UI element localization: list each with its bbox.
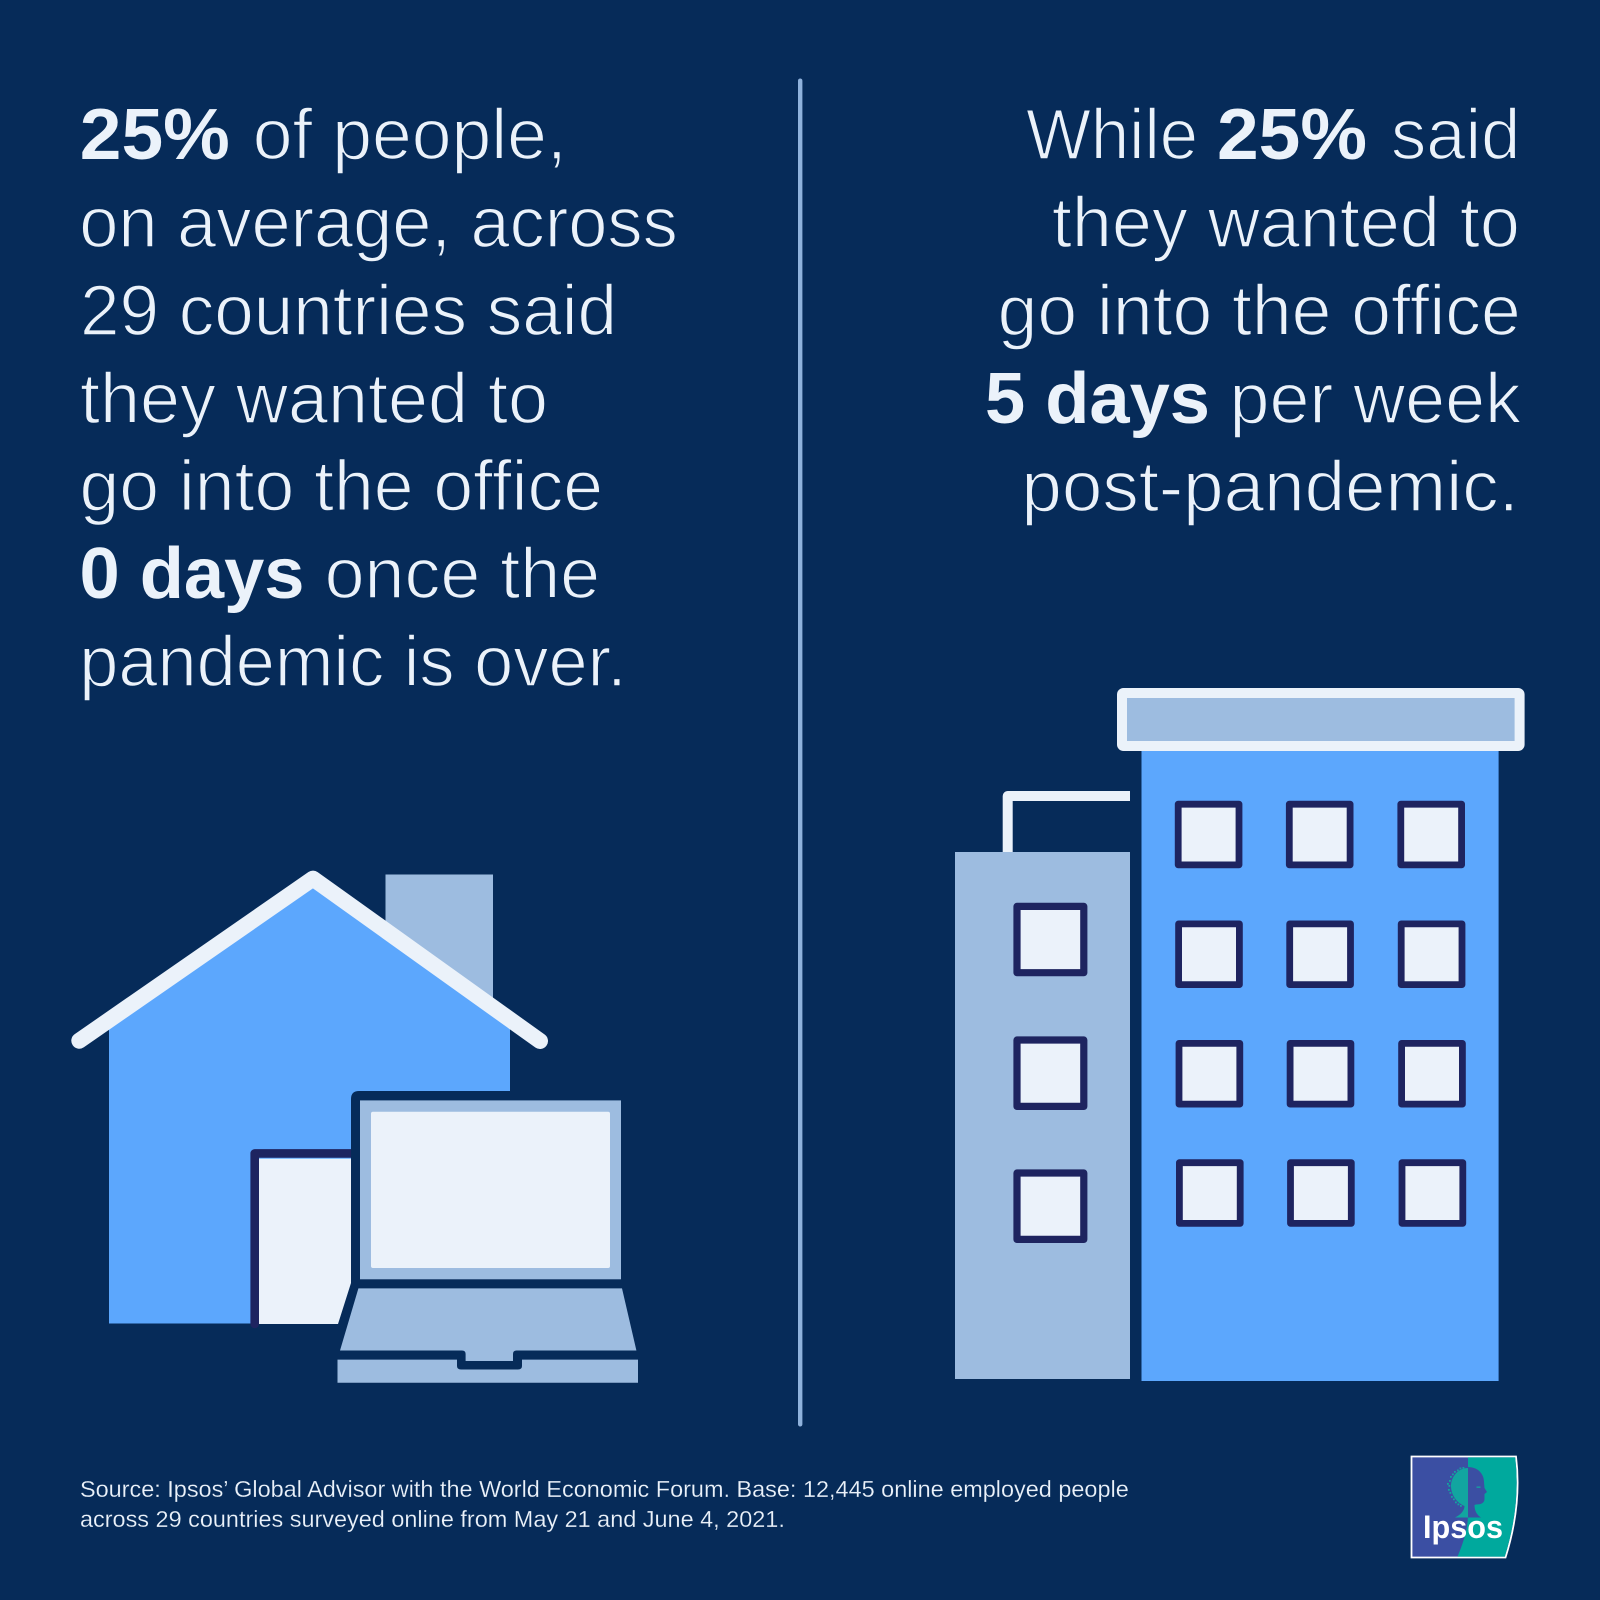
house body xyxy=(109,880,510,1324)
heading: right statement: 25% xyxy=(1217,95,1367,175)
roof cap xyxy=(1122,693,1520,746)
heading: right statement: 5 days xyxy=(985,359,1210,439)
main tower xyxy=(1142,745,1499,1381)
chimney xyxy=(386,874,493,1004)
heading: left statement: they wanted to xyxy=(80,360,548,439)
source note: Source: Ipsos’ Global Advisor with the World Economic Forum. Base: 12,445 online employed people xyxy=(80,1476,1129,1502)
heading: right statement: per week xyxy=(1230,360,1522,439)
source note xyxy=(80,1476,1129,1532)
face silhouette xyxy=(1468,1467,1487,1518)
heading: left statement: pandemic is over. xyxy=(79,623,627,702)
heading: left statement: of people, xyxy=(253,96,567,175)
center divider xyxy=(798,78,802,1426)
heading: left statement: once the xyxy=(325,535,600,614)
heading: left statement xyxy=(79,95,678,702)
heading: right statement xyxy=(985,95,1522,527)
icon: office buildings xyxy=(955,693,1520,1381)
heading: right statement: go into the office xyxy=(998,272,1521,351)
heading: left statement: on average, across xyxy=(79,184,678,263)
antenna pipe xyxy=(1008,796,1130,853)
laptop xyxy=(338,1091,638,1383)
heading: right statement: While xyxy=(1026,96,1198,175)
icon: house with laptop xyxy=(79,874,638,1383)
logo wordmark: Ipsos xyxy=(1423,1509,1503,1545)
heading: left statement: 0 days xyxy=(80,534,304,614)
heading: left statement: 29 countries said xyxy=(80,272,617,351)
roof xyxy=(79,879,540,1041)
source note: across 29 countries surveyed online from May 21 and June 4, 2021. xyxy=(80,1506,785,1532)
heading: right statement: said xyxy=(1391,96,1520,175)
left tower xyxy=(955,852,1130,1379)
heading: left statement: 25% xyxy=(80,95,230,175)
main tower windows xyxy=(1178,804,1463,1223)
heading: right statement: they wanted to xyxy=(1052,184,1520,263)
heading: left statement: go into the office xyxy=(80,448,603,526)
left tower windows xyxy=(1017,906,1084,1239)
door xyxy=(255,1153,352,1324)
tree silhouette xyxy=(1447,1467,1468,1518)
logo: Ipsos xyxy=(1412,1456,1518,1558)
heading: right statement: post-pandemic. xyxy=(1021,448,1519,527)
